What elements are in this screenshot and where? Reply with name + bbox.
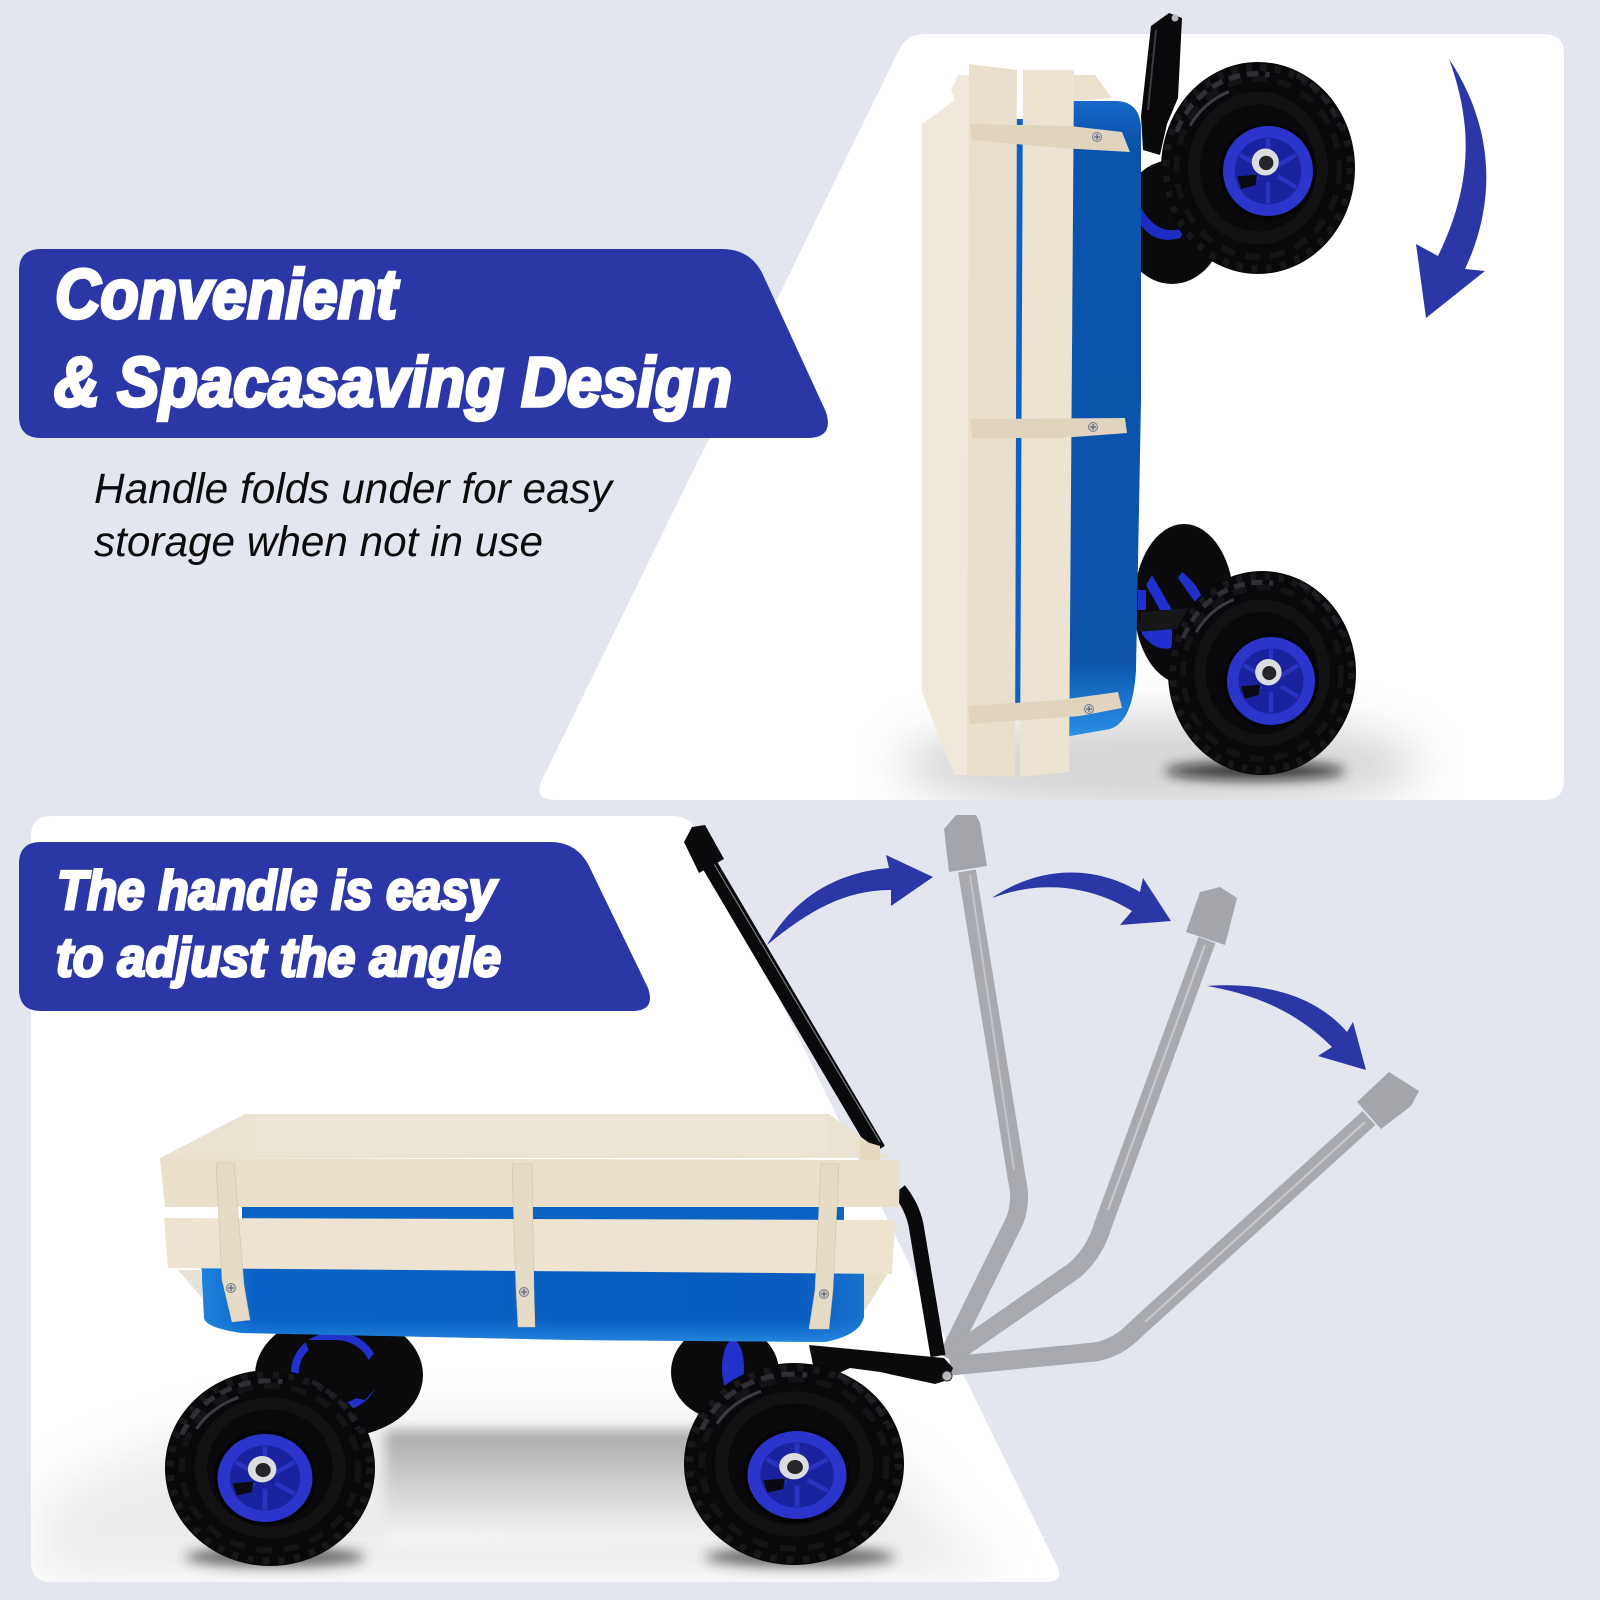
banner: adjustable handle heading: to adjust the angle (56, 926, 501, 988)
wagon ground shadow (40, 1417, 1000, 1582)
bottom bracket (968, 692, 1122, 724)
slat one (967, 64, 1017, 777)
folded wagon upper front wheel (1161, 62, 1355, 274)
right wood lower end (864, 1270, 890, 1312)
gray handle position two (948, 887, 1237, 1358)
text block: folding description: Handle folds under for easy (94, 465, 614, 513)
left wood lower end (178, 1270, 202, 1298)
screw on folded handle (1172, 14, 1178, 22)
axle bracket (809, 1345, 953, 1384)
banner: convenient design heading: Convenient (55, 255, 399, 333)
arrow: fold downward (1416, 59, 1486, 318)
wagon tub (201, 1262, 864, 1342)
middle strap (512, 1164, 535, 1327)
folded end panel (922, 75, 970, 775)
black handle upper (684, 825, 880, 1150)
folded wagon upper rear wheel (1120, 160, 1224, 284)
bracket screws (1084, 132, 1102, 714)
folded wagon lower front wheel (1168, 571, 1356, 775)
front left wheel (165, 1370, 375, 1566)
panel: folded wagon background (539, 34, 1564, 800)
folded wagon photo (900, 13, 1420, 815)
banner: convenient design heading (19, 249, 828, 438)
top rail (160, 1158, 900, 1207)
strap screws (226, 1284, 828, 1298)
folded handle (1141, 13, 1182, 155)
lower rail (164, 1218, 895, 1274)
folded tub (1066, 101, 1141, 736)
banner: adjustable handle heading: The handle is easy (57, 859, 498, 921)
pivot screw (942, 1371, 952, 1381)
panel: adjustable handle background (31, 816, 1059, 1582)
text block: folding description (94, 465, 614, 566)
rear left wheel (255, 1313, 423, 1437)
left strap (216, 1163, 250, 1322)
text block: folding description: storage when not in use (94, 518, 543, 566)
folded wagon ground shadow (900, 715, 1420, 815)
gray handle position one (944, 815, 1019, 1358)
top bracket (970, 124, 1130, 152)
tub lower highlight (201, 1262, 864, 1342)
banner: adjustable handle heading (19, 842, 650, 1011)
upright wagon photo (40, 825, 1000, 1582)
folded handle highlight (1148, 30, 1156, 110)
middle bracket (970, 418, 1127, 438)
arrow: handle step three (1207, 985, 1366, 1070)
right strap (809, 1164, 839, 1329)
inner back panel (250, 1116, 829, 1155)
top end piece (1072, 75, 1112, 101)
gray handle position three (950, 1072, 1419, 1366)
tub highlight strip (1015, 119, 1026, 703)
banner: convenient design heading: & Spacasaving Design (54, 343, 732, 421)
back wall of crate (160, 1114, 890, 1158)
arrow: handle step two (992, 872, 1171, 925)
arrow: handle step one (767, 855, 933, 945)
rear right wheel (671, 1324, 779, 1420)
blue strip between rails (242, 1206, 844, 1220)
right end stub (860, 1140, 880, 1162)
folded wagon lower rear wheel (1134, 524, 1234, 684)
front right wheel (684, 1363, 904, 1565)
slat two (1020, 70, 1074, 777)
black handle lower (899, 1190, 938, 1356)
